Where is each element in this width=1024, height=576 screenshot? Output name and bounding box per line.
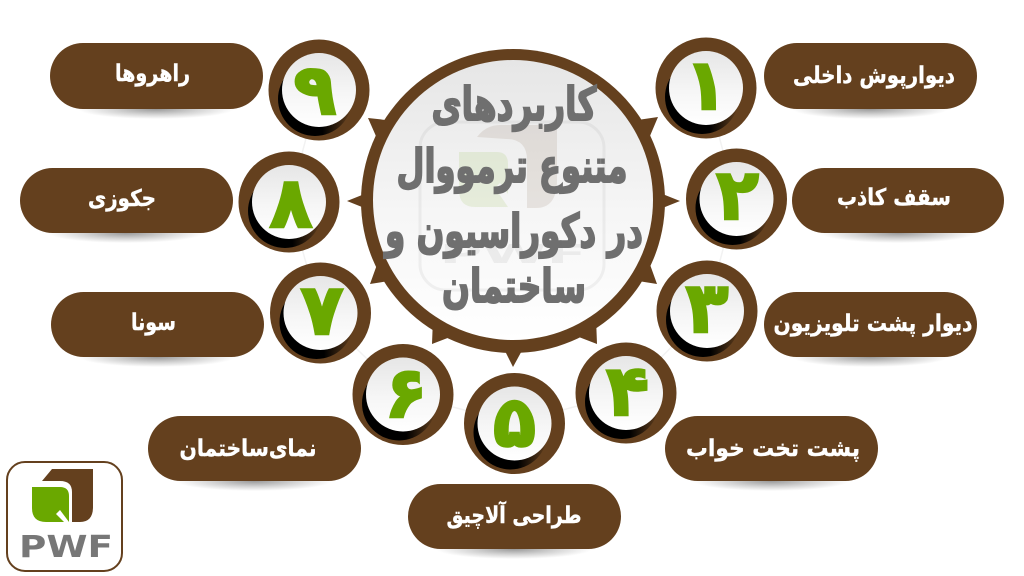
PWF logo: PWF <box>19 530 113 565</box>
item 8: label <box>20 168 233 243</box>
watermark logo inside hub <box>420 122 604 290</box>
item 5: label <box>408 484 621 559</box>
item 9: label: راهروها <box>115 61 190 87</box>
item 2: label: سقف کاذب <box>837 185 951 211</box>
item 7: badge <box>270 262 371 364</box>
PWF logo <box>7 462 122 571</box>
item 5: badge: ۵ <box>493 381 536 463</box>
item 6: badge <box>352 344 454 445</box>
item 8: badge <box>238 152 340 252</box>
item 5: badge <box>464 373 565 474</box>
title <box>384 77 643 313</box>
item 3: badge: ۳ <box>686 267 728 349</box>
title: در دکوراسیون و <box>384 204 643 258</box>
item 4: badge <box>576 342 676 444</box>
item 7: label <box>51 292 264 367</box>
item 4: badge: ۴ <box>606 350 649 432</box>
item 6: label: نمای‌ساختمان <box>180 436 316 462</box>
item 7: label: سونا <box>131 310 176 336</box>
title: ساختمان <box>442 259 586 313</box>
item 9: badge <box>268 40 370 140</box>
item 3: label: دیوار پشت تلویزیون <box>774 311 973 337</box>
item 1: label: دیوارپوش داخلی <box>793 63 955 89</box>
item 2: badge: ۲ <box>716 154 759 236</box>
item 5: label: طراحی آلاچیق <box>446 500 582 529</box>
item 8: badge: ۸ <box>270 162 312 244</box>
item 4: label: پشت تخت خواب <box>686 436 860 462</box>
item 3: label <box>764 292 977 367</box>
item 8: label: جکوزی <box>88 186 156 212</box>
item 9: badge: ۹ <box>294 49 336 131</box>
watermark logo inside hub: PWF <box>440 240 586 270</box>
title: کاربردهای <box>432 77 597 131</box>
item 7: badge: ۷ <box>301 269 343 351</box>
item 1: label <box>764 43 977 119</box>
center hub: spiked ring <box>347 49 680 367</box>
title: متنوع ترمووال <box>396 139 628 193</box>
item 3: badge <box>656 260 758 362</box>
item 9: label <box>50 43 263 119</box>
item 6: badge: ۶ <box>385 352 427 434</box>
item 2: badge <box>686 148 787 250</box>
item 6: label <box>148 416 361 491</box>
item 4: label <box>665 416 878 491</box>
item 2: label <box>792 168 1004 243</box>
item 1: badge <box>656 38 756 138</box>
item 1: badge: ۱ <box>685 44 727 126</box>
